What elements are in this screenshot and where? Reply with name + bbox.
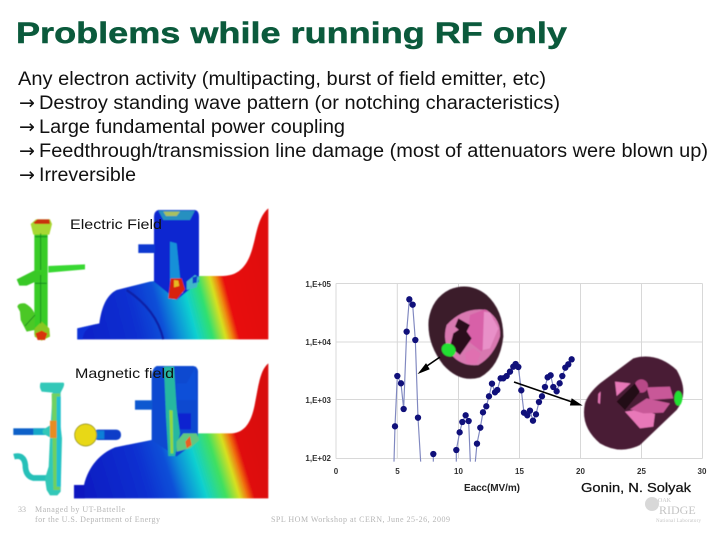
icon: electric field cavity <box>77 208 268 339</box>
footer: managed by: 33 <box>18 505 26 514</box>
text block: problem list: Irreversible <box>39 165 136 186</box>
chart x axis labels <box>334 467 707 476</box>
text block: problem list: → <box>19 140 35 162</box>
icon: electric field antenna <box>17 219 85 341</box>
footer: managed by: Managed by UT-Battelle <box>35 505 125 514</box>
chart x axis labels: 30 <box>698 467 707 476</box>
chart: field emission versus Eacc <box>305 280 707 494</box>
text block: problem list <box>18 69 708 186</box>
chart x axis labels: 5 <box>395 467 400 476</box>
chart y axis labels: 1,E+05 <box>305 280 332 289</box>
text block: problem list: Large fundamental power coupling <box>39 117 345 138</box>
text block: problem list: Feedthrough/transmission line damage (most of attenuators were blown up) <box>39 141 708 162</box>
chart x axis labels: 25 <box>637 467 646 476</box>
footer: managed by <box>18 505 160 524</box>
label: electric field: Electric Field <box>70 216 162 232</box>
chart y axis labels: 1,E+03 <box>305 396 332 405</box>
text block: problem list: Destroy standing wave pattern (or notching characteristics) <box>39 93 560 114</box>
magnetic field simulation image <box>13 363 268 498</box>
text block: problem list: → <box>19 164 35 186</box>
logo: Oak Ridge National Laboratory: OAK <box>658 498 672 504</box>
icon: magnetic field loop <box>75 424 121 446</box>
chart data series <box>392 296 575 462</box>
chart y axis labels: 1,E+04 <box>305 338 332 347</box>
text block: problem list: → <box>19 92 35 114</box>
chart y axis labels <box>305 280 332 463</box>
chart grid <box>336 284 702 458</box>
chart x axis labels: 0 <box>334 467 339 476</box>
text block: problem list: → <box>19 116 35 138</box>
logo: Oak Ridge National Laboratory <box>645 497 702 524</box>
chart x axis labels: 10 <box>454 467 463 476</box>
chart y axis labels: 1,E+02 <box>305 454 332 463</box>
chart x axis labels: 20 <box>576 467 585 476</box>
icon: cavity model left <box>428 287 503 379</box>
logo: Oak Ridge National Laboratory: RIDGE <box>659 503 696 517</box>
icon: cavity model right <box>584 357 683 450</box>
logo: Oak Ridge National Laboratory: National Laboratory <box>656 519 702 524</box>
icon: magnetic field antenna <box>13 383 64 495</box>
footer: managed by: for the U.S. Department of Energy <box>35 515 160 524</box>
label: magnetic field: Magnetic field <box>75 365 174 381</box>
electric field simulation image <box>17 208 268 341</box>
arrow: to right cavity point <box>514 382 581 405</box>
chart x axis title: Eacc(MV/m) <box>464 483 520 494</box>
title: Problems while running RF only <box>16 17 567 50</box>
text block: problem list: Any electron activity (multipacting, burst of field emitter, etc) <box>18 69 546 90</box>
credit: Gonin, N. Solyak <box>581 480 692 495</box>
footer: workshop: SPL HOM Workshop at CERN, June 25-26, 2009 <box>271 515 450 524</box>
arrow: to left cavity point <box>419 357 440 373</box>
icon: magnetic field cavity <box>74 363 268 498</box>
chart x axis labels: 15 <box>515 467 524 476</box>
